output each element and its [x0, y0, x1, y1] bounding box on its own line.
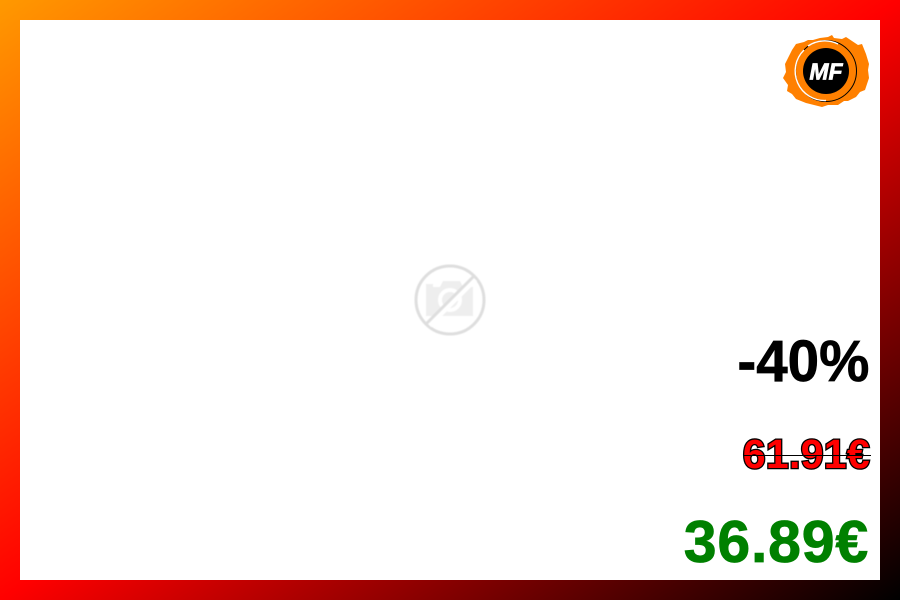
- original price: 61.91€: [743, 431, 870, 477]
- sale price: 36.89€: [684, 509, 869, 575]
- strikethrough line: [743, 455, 871, 456]
- logo: MF badge: MF: [809, 58, 844, 84]
- logo: MF badge: [783, 35, 869, 107]
- discount percentage: -40%: [737, 329, 869, 394]
- icon: no image placeholder: [414, 264, 486, 336]
